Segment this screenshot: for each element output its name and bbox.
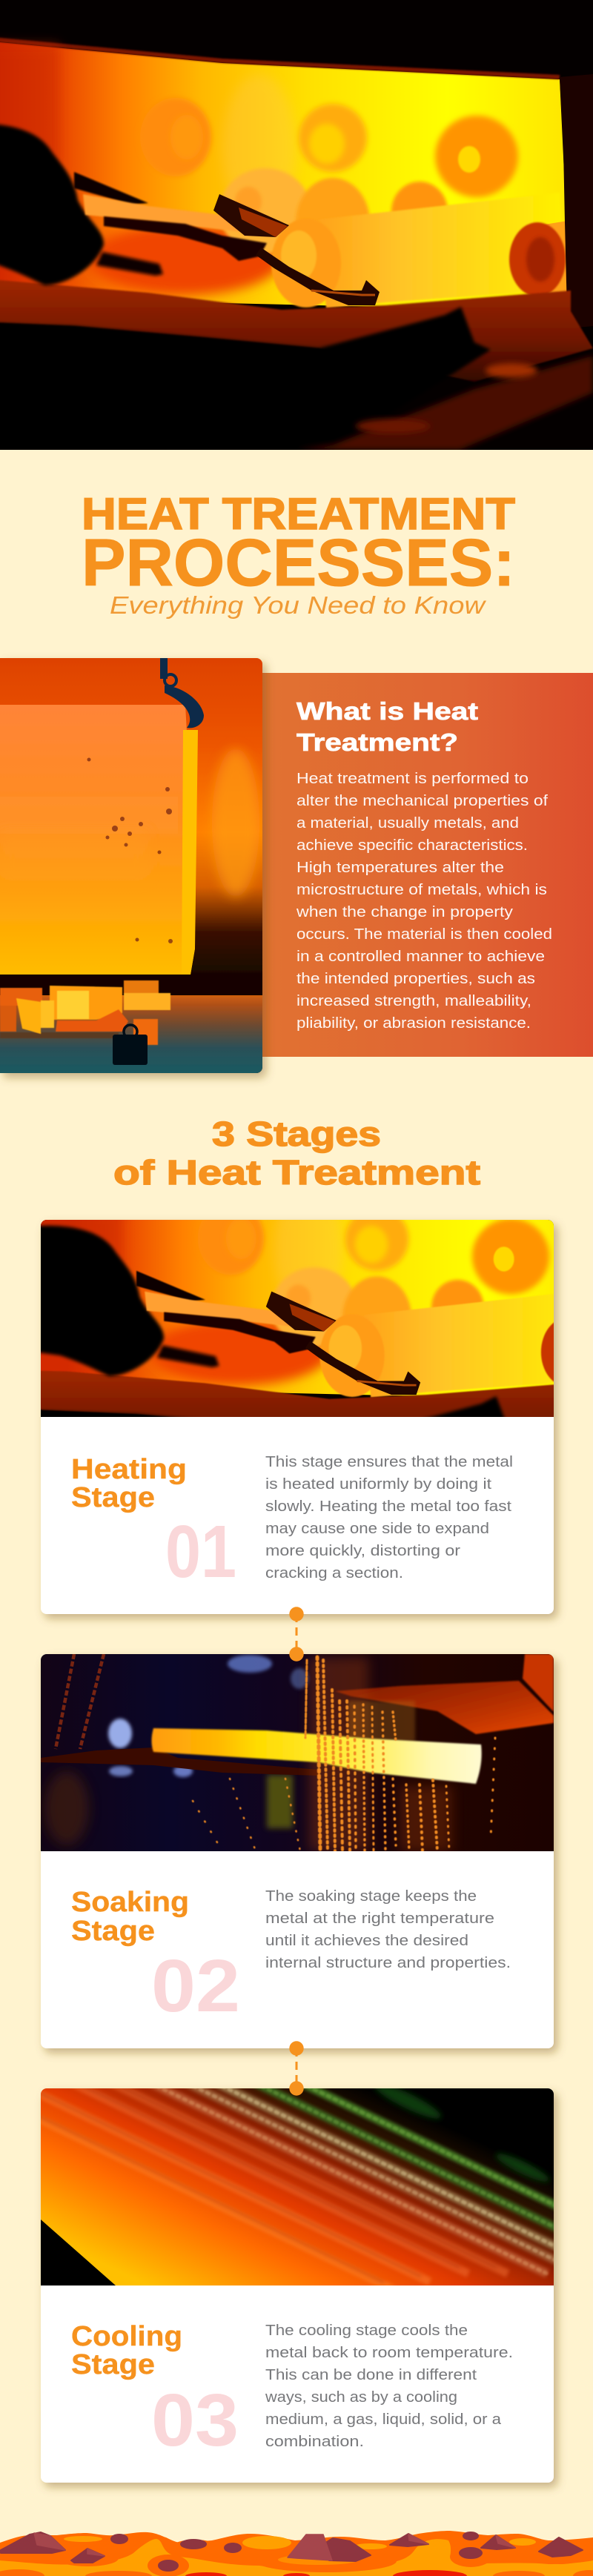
text: definition paragraph: in a controlled manner to achieve (296, 949, 545, 965)
text: heating description: slowly. Heating the metal too fast (265, 1498, 511, 1515)
text: cooling description: metal back to room temperature. (265, 2345, 513, 2361)
image: glowing bar with sparks (41, 1654, 554, 1851)
text: soaking description: internal structure and properties. (265, 1955, 511, 1971)
heading: cooling stage: Stage (71, 2349, 155, 2380)
text: definition paragraph: when the change in property (296, 904, 513, 920)
decoration: molten lava with rocks (0, 2531, 593, 2576)
text: definition paragraph: the intended properties, such as (296, 971, 535, 987)
text: soaking description: The soaking stage keeps the (265, 1888, 477, 1905)
text: heating description: cracking a section. (265, 1565, 403, 1581)
image: hanging ladle of molten metal (0, 658, 262, 1073)
image: cooling ribbed metal bars (41, 2088, 554, 2285)
card: cooling stage (39, 2087, 563, 2493)
heading: heating stage (71, 1454, 187, 1513)
text: definition paragraph: achieve specific characteristics. (296, 837, 528, 854)
text: cooling description: combination. (265, 2434, 364, 2450)
section heading: 3 stages of heat treatment: of Heat Treatment (113, 1153, 480, 1192)
text: definition paragraph (296, 771, 552, 1032)
title: HEAT TREATMENT (82, 489, 515, 539)
heading: soaking stage: Stage (71, 1916, 155, 1947)
text: cooling description: medium, a gas, liquid, solid, or a (265, 2411, 502, 2428)
text: cooling description: The cooling stage cools the (265, 2323, 468, 2339)
text: definition paragraph: occurs. The material is then cooled (296, 926, 552, 943)
heading: cooling stage (71, 2321, 182, 2380)
text: definition paragraph: alter the mechanical properties of (296, 793, 549, 809)
title: PROCESSES: (82, 526, 515, 600)
text: soaking description (265, 1888, 511, 1971)
title (82, 489, 515, 619)
text: cooling description (265, 2323, 513, 2450)
text: definition paragraph: microstructure of metals, which is (296, 882, 547, 898)
card: heating stage (39, 1218, 563, 1624)
heading: cooling stage: Cooling (71, 2321, 182, 2352)
text: heating description: is heated uniformly by doing it (265, 1476, 492, 1493)
heading: what is heat treatment: Treatment? (296, 728, 458, 756)
heading: soaking stage (71, 1887, 189, 1947)
heading: heating stage: Heating (71, 1454, 187, 1485)
section heading: 3 stages of heat treatment (113, 1115, 480, 1192)
number 03: 03 (151, 2379, 239, 2462)
panel: what is heat treatment (262, 673, 593, 1057)
heading: what is heat treatment: What is Heat (296, 697, 478, 725)
text: heating description: more quickly, distorting or (265, 1543, 460, 1559)
heading: heating stage: Stage (71, 1482, 155, 1513)
heading: what is heat treatment (296, 697, 478, 756)
number 02: 02 (151, 1945, 240, 2028)
section heading: 3 stages of heat treatment: 3 Stages (212, 1115, 381, 1153)
connector: card 2 to card 3 (289, 2041, 304, 2096)
text: heating description: may cause one side to expand (265, 1521, 489, 1537)
text: cooling description: ways, such as by a cooling (265, 2389, 457, 2406)
text: definition paragraph: Heat treatment is performed to (296, 771, 529, 787)
text: soaking description: until it achieves the desired (265, 1933, 468, 1949)
text: definition paragraph: a material, usually metals, and (296, 815, 519, 831)
image: heating stage furnace (41, 1220, 554, 1417)
text: heating description: This stage ensures that the metal (265, 1454, 513, 1470)
hero image: furnace with glowing tubes (0, 0, 593, 450)
text: heating description (265, 1454, 513, 1581)
connector: card 1 to card 2 (289, 1607, 304, 1662)
number 01: 01 (165, 1510, 236, 1593)
text: soaking description: metal at the right temperature (265, 1911, 494, 1927)
text: definition paragraph: High temperatures alter the (296, 860, 504, 876)
text: cooling description: This can be done in different (265, 2367, 477, 2383)
text: definition paragraph: pliability, or abrasion resistance. (296, 1015, 531, 1032)
heading: soaking stage: Soaking (71, 1887, 189, 1918)
title: Everything You Need to Know (110, 591, 486, 619)
card: soaking stage (41, 1654, 554, 2048)
text: definition paragraph: increased strength, malleability, (296, 993, 531, 1009)
